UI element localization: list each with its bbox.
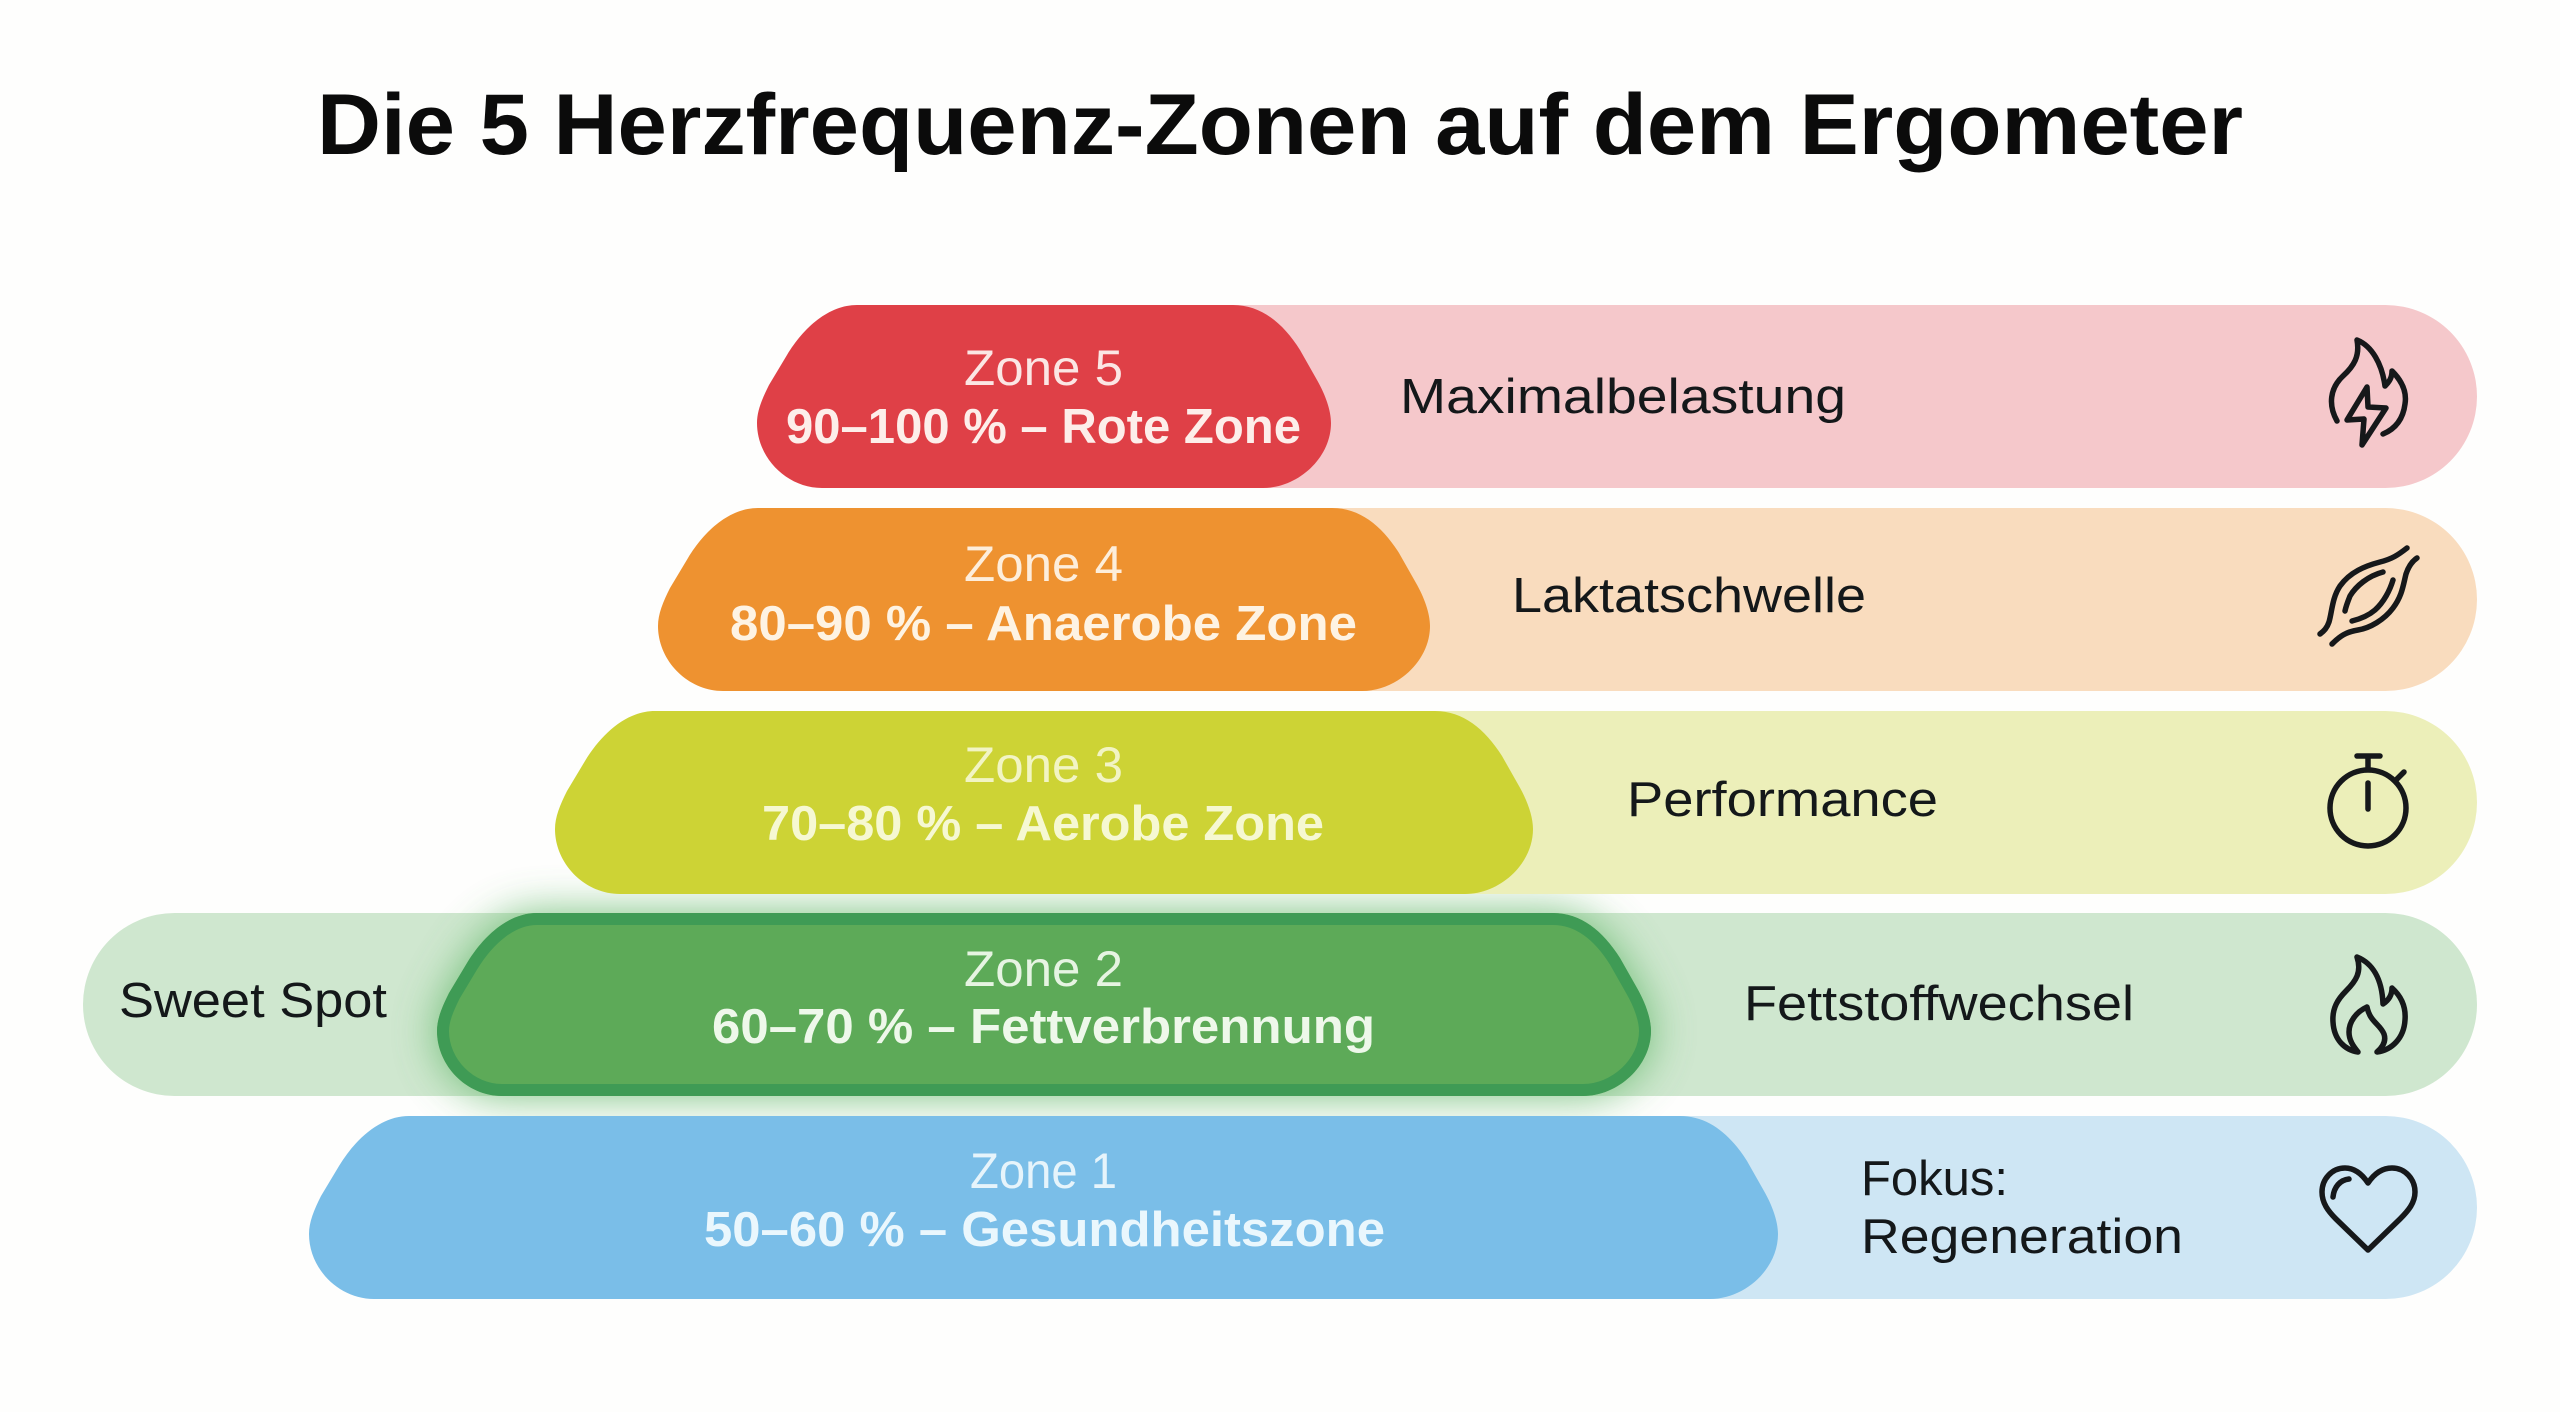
panel: zone 4 row xyxy=(658,508,2477,691)
icon: flame with lightning bolt xyxy=(2331,340,2405,445)
zone 1 label: Regeneration xyxy=(1861,1210,2183,1264)
title: Die 5 Herzfrequenz-Zonen auf dem Ergometer xyxy=(317,77,2243,173)
zone 5 range: 90–100 % – Rote Zone xyxy=(786,400,1301,454)
zone 1 label: Fokus: xyxy=(1861,1152,2008,1206)
icon: heart xyxy=(2322,1168,2415,1250)
panel: zone 3 row xyxy=(555,711,2477,894)
zone 2 range: 60–70 % – Fettverbrennung xyxy=(712,1000,1375,1054)
zone 3 background bar xyxy=(700,711,2477,894)
zone 4 label: Laktatschwelle xyxy=(1512,569,1866,623)
sweet spot label: Sweet Spot xyxy=(119,974,387,1028)
zone 4 background bar xyxy=(800,508,2477,691)
zone 2 label: Fettstoffwechsel xyxy=(1744,977,2134,1031)
icon: stopwatch xyxy=(2330,756,2406,846)
zone 5 pill xyxy=(757,305,1331,488)
zone 3 label: Performance xyxy=(1627,773,1938,827)
zone 3 name: Zone 3 xyxy=(964,737,1123,793)
zone 4 name: Zone 4 xyxy=(964,536,1123,592)
zone 5 name: Zone 5 xyxy=(964,340,1123,396)
panel: zone 1 row xyxy=(309,1116,2477,1299)
icon: flame xyxy=(2333,957,2405,1052)
panel: zone 5 row xyxy=(757,305,2477,488)
zone 5 background bar xyxy=(900,305,2477,488)
glow around zone 2 pill xyxy=(437,913,1651,1096)
zone 2 pill xyxy=(437,913,1651,1096)
zone 2 name: Zone 2 xyxy=(964,941,1123,997)
zone 3 range: 70–80 % – Aerobe Zone xyxy=(762,797,1324,851)
zone 4 pill xyxy=(658,508,1430,691)
panel: zone 2 row (highlighted) xyxy=(83,913,2477,1096)
zone 4 range: 80–90 % – Anaerobe Zone xyxy=(730,597,1357,651)
icon: muscle xyxy=(2320,548,2417,644)
zone 1 name: Zone 1 xyxy=(970,1143,1117,1199)
zone 1 label xyxy=(1861,1152,2183,1264)
zone 1 background bar xyxy=(500,1116,2477,1299)
zone 1 range: 50–60 % – Gesundheitszone xyxy=(704,1203,1385,1257)
zone 5 label: Maximalbelastung xyxy=(1400,370,1846,424)
zone 3 pill xyxy=(555,711,1533,894)
zone 1 pill xyxy=(309,1116,1778,1299)
zone 2 background bar xyxy=(83,913,2477,1096)
